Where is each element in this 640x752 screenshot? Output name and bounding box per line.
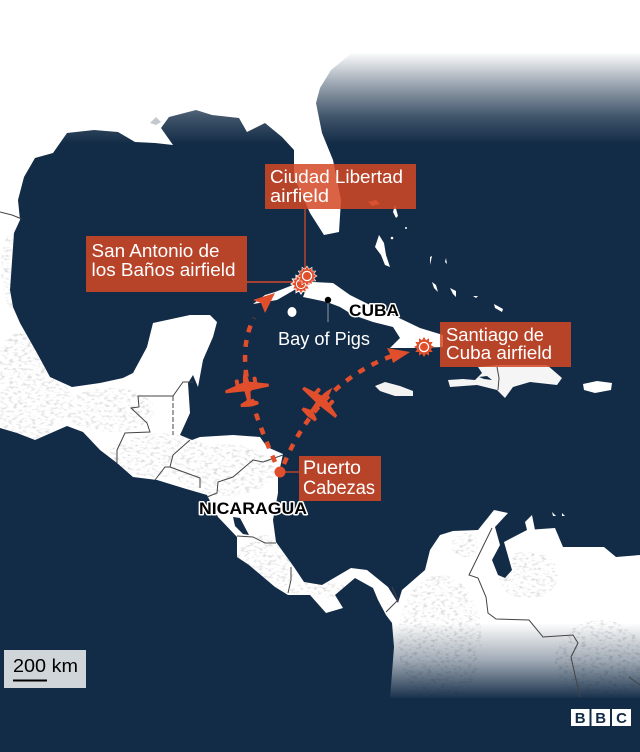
callout: Ciudad Libertad airfield: airfield: [270, 185, 329, 206]
terrain shading: [0, 230, 640, 705]
icon: explosion, Santiago de Cuba: [414, 337, 434, 357]
country borders: [0, 212, 640, 697]
annotation: Bay of Pigs: Bay of Pigs: [278, 329, 370, 349]
BBC logo: [571, 709, 631, 727]
annotation: Bay of Pigs: [278, 297, 370, 349]
callout: Santiago de Cuba airfield: Santiago de: [446, 324, 544, 345]
lakes: [150, 117, 249, 535]
island: Cuba: [253, 282, 443, 348]
flight path: to San Antonio de los Baños: [245, 293, 275, 462]
leader line: Puerto Cabezas: [280, 471, 299, 473]
top gradient: [0, 52, 640, 144]
callout: Puerto Cabezas: Cabezas: [303, 478, 375, 499]
marker: Puerto Cabezas: [274, 466, 286, 478]
bottom fade: [380, 623, 640, 698]
arrowhead: Santiago route: [387, 348, 410, 363]
icon: plane, west route: [222, 366, 272, 410]
BBC logo: B: [575, 710, 586, 727]
country label: Cuba: CUBA: [349, 301, 399, 320]
arrowhead: San Antonio route: [253, 293, 275, 313]
callout: Puerto Cabezas: Puerto: [303, 458, 361, 479]
icon: explosion, San Antonio: [291, 274, 311, 294]
callout: Ciudad Libertad airfield: Ciudad Libertad: [270, 166, 403, 187]
callout: Puerto Cabezas: [299, 456, 381, 501]
callout: Santiago de Cuba airfield: Cuba airfield: [446, 342, 552, 363]
icon: plane, east route: [291, 373, 349, 431]
top fade: [0, 0, 640, 52]
callout: San Antonio de los Baños airfield: San Antonio de: [92, 240, 220, 261]
country label: Nicaragua: NICARAGUA: [199, 499, 307, 518]
flight path: to Santiago de Cuba: [284, 348, 410, 464]
leader line: San Antonio: [247, 281, 296, 283]
callout: Ciudad Libertad airfield: [265, 164, 416, 209]
leader line: Ciudad Libertad: [304, 209, 306, 270]
islands: Caribbean and Bahamas: [288, 200, 612, 530]
scale bar: 200 km: [13, 655, 78, 676]
callout: San Antonio de los Baños airfield: [86, 236, 247, 292]
scale bar: [4, 650, 86, 688]
BBC logo: C: [616, 710, 627, 727]
BBC logo: B: [595, 710, 606, 727]
callout: Santiago de Cuba airfield: [440, 322, 571, 367]
callout: San Antonio de los Baños airfield: los Baños airfield: [92, 259, 236, 280]
icon: explosion, Ciudad Libertad: [297, 266, 317, 286]
